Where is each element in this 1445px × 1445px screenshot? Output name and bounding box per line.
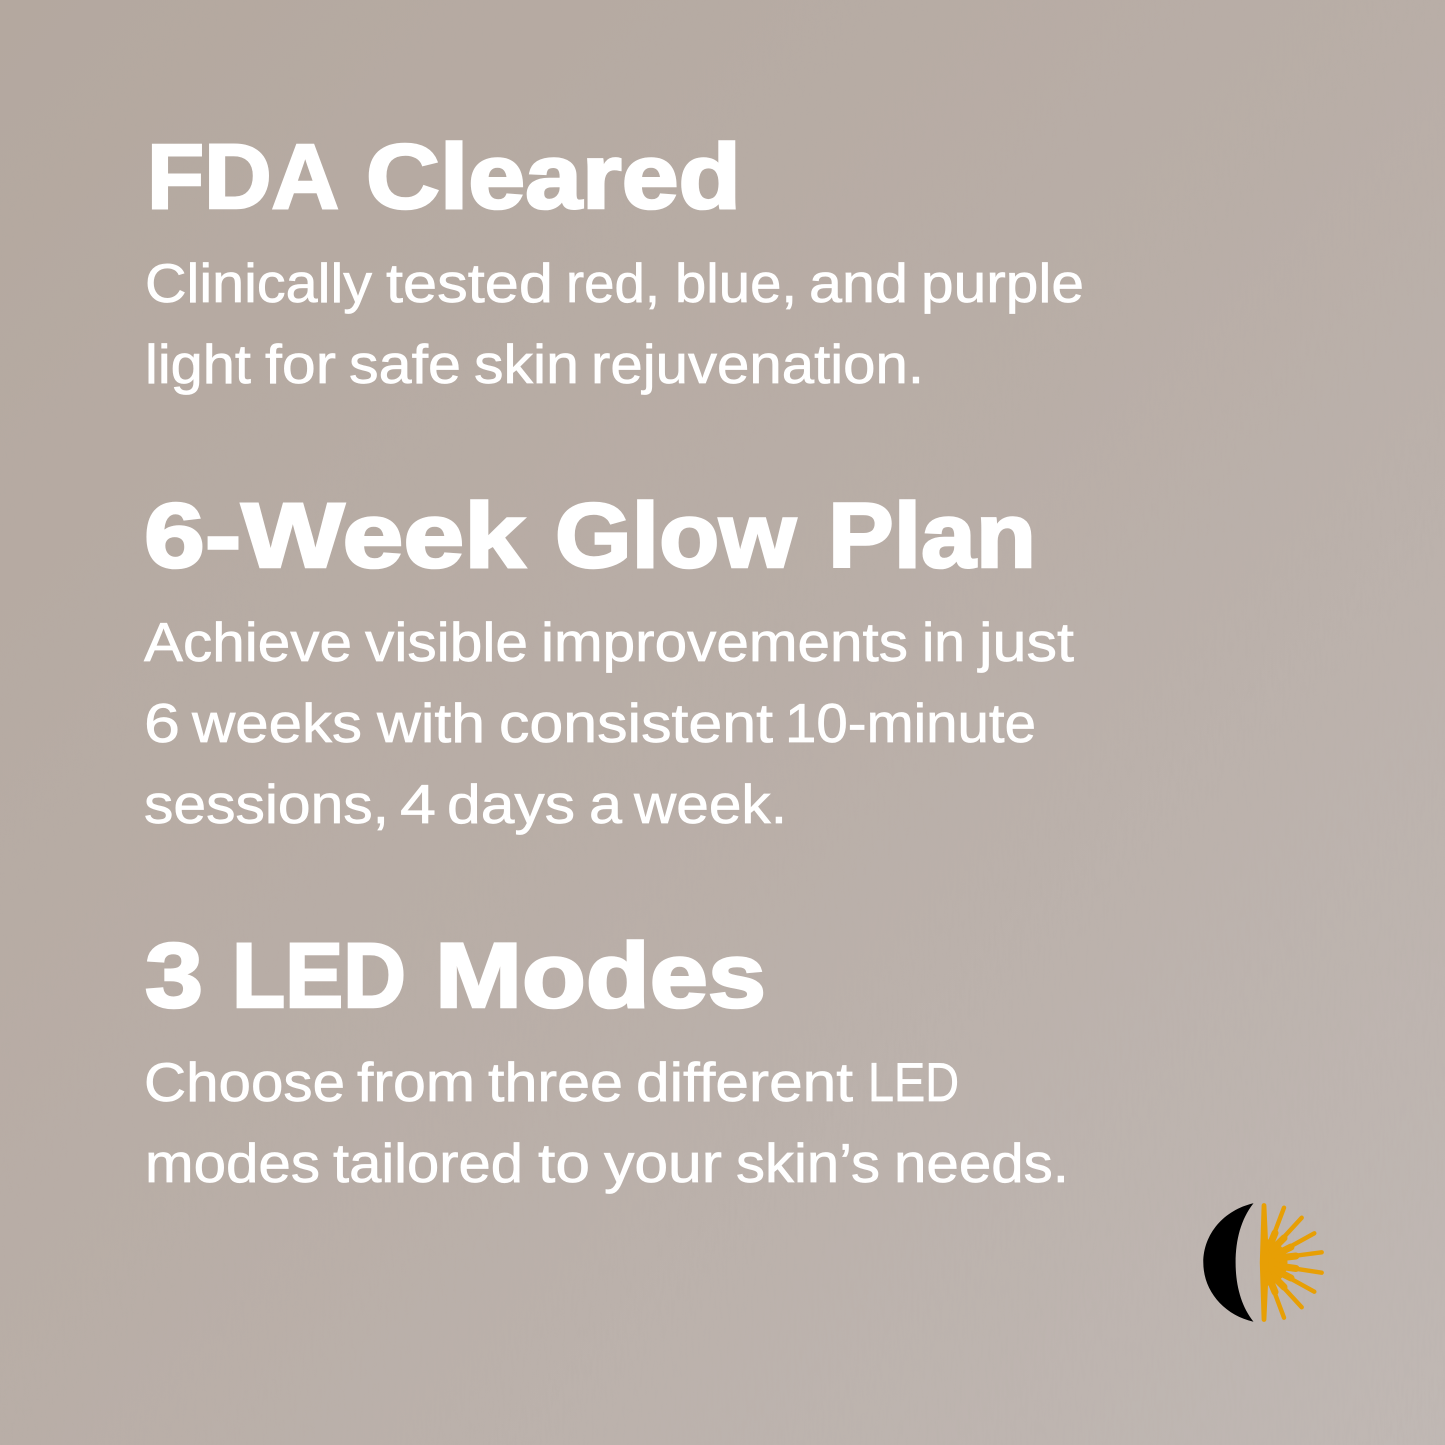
heading: 6-Week Glow Plan: Plan: [828, 485, 1036, 587]
icon: half sun with rays: [1260, 1203, 1322, 1322]
heading: 3 LED Modes: Modes: [435, 925, 766, 1027]
text block: 3 LED Modes description: modes: [145, 1132, 320, 1194]
text block: 6-Week Glow Plan description: visible: [365, 611, 528, 673]
text block: FDA Cleared description: skin: [474, 333, 579, 395]
text block: 6-Week Glow Plan description: consistent: [499, 692, 773, 754]
text block: FDA Cleared description: blue,: [675, 252, 797, 314]
heading: FDA Cleared: [147, 126, 741, 228]
heading: 3 LED Modes: [145, 925, 766, 1027]
text block: FDA Cleared description: purple: [921, 252, 1084, 314]
heading: FDA Cleared: Cleared: [366, 126, 741, 228]
text block: FDA Cleared description: Clinically: [145, 252, 373, 314]
text block: FDA Cleared description: and: [809, 252, 908, 314]
heading: 6-Week Glow Plan: [144, 485, 1036, 587]
text block: 6-Week Glow Plan description: Achieve: [144, 611, 352, 673]
text block: 3 LED Modes description: three: [488, 1051, 623, 1113]
text block: 3 LED Modes description: needs.: [894, 1132, 1069, 1194]
heading: 3 LED Modes: 3: [145, 925, 203, 1027]
text block: 6-Week Glow Plan description: just: [977, 611, 1074, 673]
text block: 3 LED Modes description: your: [604, 1132, 722, 1194]
text block: FDA Cleared description: light: [145, 333, 251, 395]
heading: 6-Week Glow Plan: Glow: [555, 485, 796, 587]
heading: 3 LED Modes: LED: [232, 925, 406, 1027]
heading: FDA Cleared: FDA: [147, 126, 339, 228]
text block: 3 LED Modes description: skin’s: [736, 1132, 880, 1194]
text block: 3 LED Modes description: tailored: [333, 1132, 523, 1194]
text block: 6-Week Glow Plan description: days: [447, 773, 575, 835]
text block: FDA Cleared description: safe: [349, 333, 461, 395]
text block: 6-Week Glow Plan description: in: [922, 611, 965, 673]
text block: 6-Week Glow Plan description: 4: [400, 773, 436, 835]
text block: FDA Cleared description: for: [265, 333, 336, 395]
text block: FDA Cleared description: tested: [386, 252, 553, 314]
text block: 6-Week Glow Plan description: with: [376, 692, 485, 754]
text block: 6-Week Glow Plan description: improvements: [541, 611, 908, 673]
text block: 3 LED Modes description: to: [538, 1132, 590, 1194]
panel: 3 LED Modes: [144, 925, 1069, 1194]
icon: crescent moon and sun logo: [1203, 1203, 1322, 1322]
text block: 6-Week Glow Plan description: 6: [144, 692, 180, 754]
text block: 6-Week Glow Plan description: sessions,: [144, 773, 389, 835]
text block: 3 LED Modes description: different: [636, 1051, 853, 1113]
text block: 3 LED Modes description: from: [357, 1051, 475, 1113]
text block: 3 LED Modes description: [144, 1051, 1069, 1194]
text block: 6-Week Glow Plan description: week.: [633, 773, 787, 835]
text block: FDA Cleared description: [145, 252, 1084, 395]
panel: 6-Week Glow Plan: [144, 485, 1074, 835]
text block: FDA Cleared description: red,: [566, 252, 660, 314]
panel: FDA Cleared: [145, 126, 1084, 395]
text block: 6-Week Glow Plan description: a: [589, 773, 622, 835]
heading: 6-Week Glow Plan: 6-Week: [144, 485, 526, 587]
text block: 3 LED Modes description: Choose: [144, 1051, 345, 1113]
icon: crescent moon: [1203, 1203, 1254, 1322]
text block: 3 LED Modes description: LED: [868, 1051, 959, 1113]
text block: 6-Week Glow Plan description: weeks: [191, 692, 362, 754]
text block: 6-Week Glow Plan description: [144, 611, 1074, 835]
text block: 6-Week Glow Plan description: 10-minute: [785, 692, 1036, 754]
text block: FDA Cleared description: rejuvenation.: [591, 333, 924, 395]
